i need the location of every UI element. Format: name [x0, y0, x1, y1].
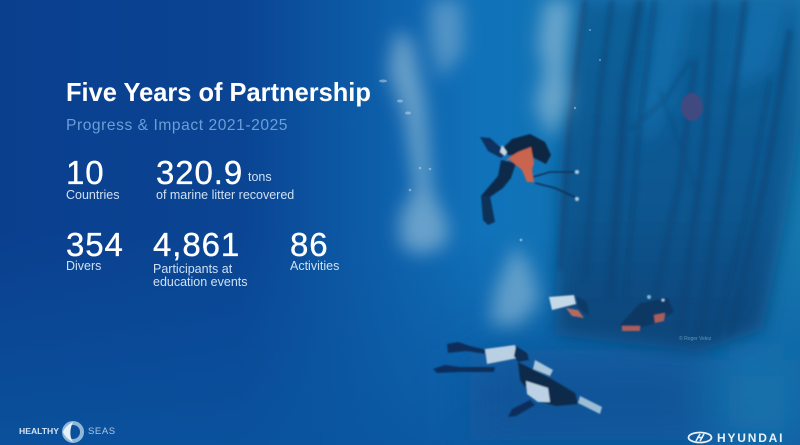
logo: Healthy Seas: SEAS — [88, 426, 116, 437]
red buoy — [681, 93, 703, 121]
stat: countries — [66, 154, 120, 202]
stat: participants — [153, 226, 248, 288]
stat: participants: education events — [153, 274, 248, 288]
lower dark haze — [470, 350, 800, 445]
diver top — [480, 134, 579, 225]
stat: activities: 86 — [290, 226, 329, 263]
title: Five Years of Partnership — [66, 79, 371, 107]
stat: divers: 354 — [66, 226, 124, 263]
stat: marine litter — [156, 154, 294, 202]
subtitle: Progress & Impact 2021-2025 — [66, 117, 288, 134]
stat: divers: Divers — [66, 259, 101, 273]
stat: participants: 4,861 — [153, 226, 240, 263]
stat: marine litter: 320.9 — [156, 154, 243, 191]
stat: participants: Participants at — [153, 262, 232, 276]
bubble columns — [388, 0, 572, 325]
stat: marine litter: of marine litter recovered — [156, 188, 294, 202]
scattered bubbles — [379, 29, 601, 242]
logo: Healthy Seas: HEALTHY — [19, 426, 59, 436]
stat: marine litter: tons — [248, 170, 272, 184]
divers bottom — [433, 295, 674, 417]
stat: activities: Activities — [290, 259, 339, 273]
net wall — [556, 0, 800, 352]
stat: countries: Countries — [66, 188, 120, 202]
logo: Hyundai — [688, 431, 784, 445]
stat: activities — [290, 226, 339, 273]
logo: Hyundai: HYUNDAI — [717, 431, 784, 445]
photo credit: © Roger Velez — [679, 335, 712, 342]
stat: countries: 10 — [66, 154, 105, 191]
logo: Healthy Seas — [19, 421, 116, 443]
